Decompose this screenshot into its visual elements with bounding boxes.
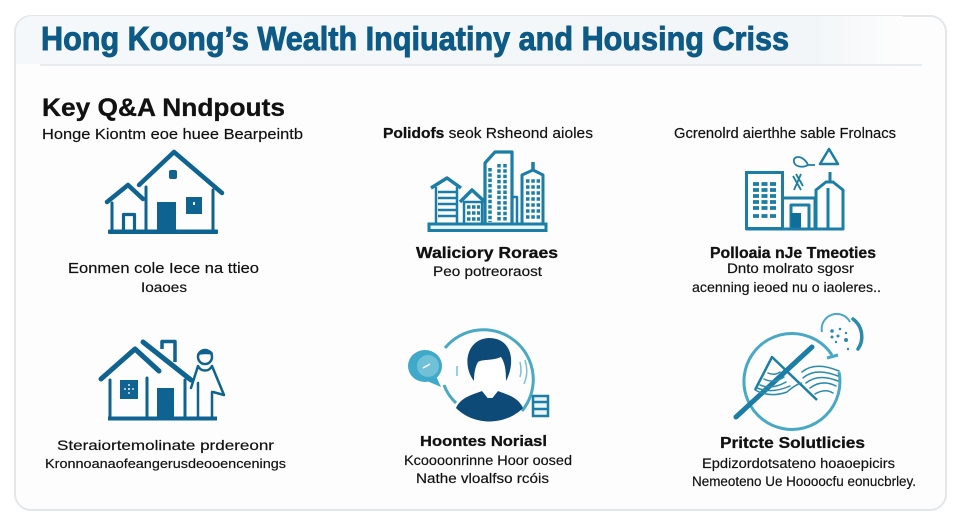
item text — [404, 452, 572, 486]
panel: top middle item — [383, 125, 593, 279]
panel: top right item — [674, 126, 896, 295]
item caption: Steraiortemolinate prdereonr — [57, 437, 274, 453]
item heading: Hoontes Noriasl — [420, 433, 547, 450]
item text: Nathe vloalfso rcóis — [416, 471, 549, 486]
item caption — [45, 437, 287, 471]
item heading: Polloaia nJe Tmeoties — [710, 245, 876, 262]
item text: Nemeoteno Ue Hoooocfu eonucbrley. — [692, 474, 916, 489]
item text — [692, 456, 916, 489]
item text: Epdizordotsateno hoaoepicirs — [702, 456, 895, 471]
icon: house with person — [101, 342, 224, 420]
panel: bottom right item — [692, 314, 916, 489]
item caption — [68, 261, 259, 295]
item text: Kcoooonrinne Hoor oosed — [404, 452, 572, 468]
item text: Dnto molrato sgosr — [727, 261, 855, 276]
icon: flag in circle with dots — [736, 314, 862, 429]
item text: acenning ieoed nu o iaoleres.. — [692, 279, 881, 295]
intro text: Gcrenolrd aierthhe sable Frolnacs — [674, 126, 896, 142]
panel: top left item — [42, 126, 303, 295]
panel: bottom left item — [45, 342, 287, 471]
item text — [692, 261, 881, 295]
title: Hong Koong’s Wealth Inqiuatiny and Housing Criss — [41, 20, 789, 57]
item heading: Waliciory Roraes — [416, 245, 558, 262]
icon: buildings with roof and speech loop — [746, 149, 843, 229]
icon: city towers — [429, 152, 546, 230]
item caption: Ioaoes — [141, 279, 187, 295]
title banner — [16, 16, 922, 65]
item text: Peo potreoraost — [433, 264, 542, 279]
icon: two houses — [107, 152, 222, 234]
icon: person in circle with chat bubble — [408, 330, 548, 422]
panel: bottom middle item — [404, 330, 572, 486]
item caption: Eonmen cole Iece na ttieo — [68, 261, 259, 277]
item heading: Pritcte Solutlicies — [720, 435, 865, 452]
intro text: Polidofs seok Rsheond aioles — [383, 125, 593, 142]
intro text: Honge Kiontm eoe huee Bearpeintb — [42, 126, 303, 143]
section heading: Key Q&A Nndpouts — [42, 94, 285, 122]
item caption: Kronnoanaofeangerusdeooencenings — [45, 456, 287, 471]
